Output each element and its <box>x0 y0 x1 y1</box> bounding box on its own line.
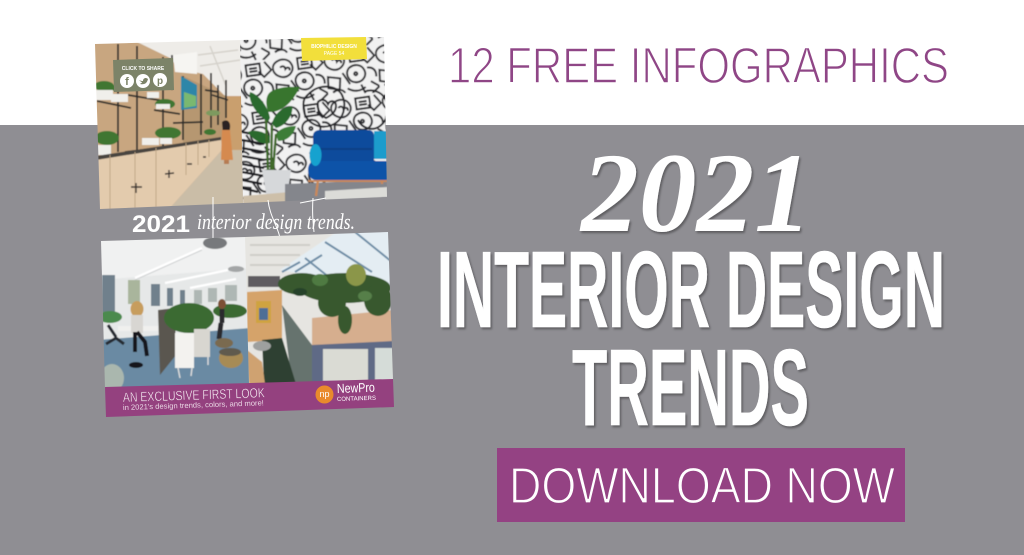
logo: newpro containers: NewPro <box>337 380 375 396</box>
plants <box>278 264 392 334</box>
sofa <box>308 130 388 196</box>
poster <box>256 301 271 323</box>
seated person <box>129 301 147 368</box>
far wood wall <box>226 96 242 150</box>
zebra stripes <box>242 132 264 192</box>
glass wall and floor <box>282 305 312 384</box>
pouf <box>104 364 124 387</box>
doodle mural <box>238 36 388 206</box>
cover subtitle <box>132 197 355 250</box>
partition <box>158 308 176 375</box>
photo: wood wall office corridor <box>90 37 245 213</box>
plaster wall <box>312 310 393 347</box>
title: 2021: 2021 <box>579 131 812 256</box>
band headline: AN EXCLUSIVE FIRST LOOK <box>123 385 265 405</box>
plants and pots <box>94 81 220 145</box>
dark top equipment <box>248 276 280 287</box>
background: grey panel <box>0 125 1024 555</box>
photo: doodle wall with plant and sofa <box>238 36 388 206</box>
lower gallery <box>312 341 393 384</box>
cover band <box>105 379 394 417</box>
standing person <box>218 299 226 339</box>
cover subtitle: 2021 <box>132 211 190 238</box>
logo: newpro containers: np <box>319 389 330 399</box>
button: download now: DOWNLOAD NOW <box>509 457 895 514</box>
badge: biophilic design page 54: PAGE 54 <box>324 51 344 57</box>
floor and rug <box>242 192 286 203</box>
icon: facebook: f <box>125 76 129 88</box>
title: trends: TRENDS <box>572 327 809 449</box>
windows <box>102 275 237 312</box>
person <box>221 120 233 164</box>
band subtext: in 2021's design trends, colors, and more! <box>123 398 264 412</box>
background: white top band <box>0 0 1024 125</box>
floor <box>170 150 245 208</box>
share box <box>113 58 174 92</box>
tv <box>181 76 197 110</box>
plant <box>248 87 300 170</box>
carpet <box>104 328 249 387</box>
shelving <box>97 44 228 152</box>
cabinets <box>96 138 222 212</box>
ceiling <box>138 40 241 97</box>
cover subtitle: interior design trends. <box>197 209 355 234</box>
logo: newpro containers <box>316 380 376 404</box>
near wall shade <box>183 76 226 146</box>
button: download now <box>497 448 905 522</box>
badge: biophilic design page 54: BIOPHILIC DESIGN <box>311 44 357 50</box>
photo: open office with planters <box>98 235 250 392</box>
stools <box>215 338 233 348</box>
wood wall <box>247 290 282 342</box>
planters <box>164 303 247 378</box>
logo: newpro containers: CONTAINERS <box>337 396 376 403</box>
pot <box>262 170 291 198</box>
photo: atrium with skylight and plants <box>243 230 395 385</box>
badge: biophilic design page 54 <box>301 37 367 61</box>
icon: pinterest: p <box>157 76 163 87</box>
seats <box>253 341 271 351</box>
desk and chair <box>118 326 158 330</box>
ceiling lights <box>135 248 236 288</box>
icon: twitter <box>136 74 150 88</box>
share box: CLICK TO SHARE <box>122 66 165 72</box>
report cover thumbnail <box>90 36 395 417</box>
